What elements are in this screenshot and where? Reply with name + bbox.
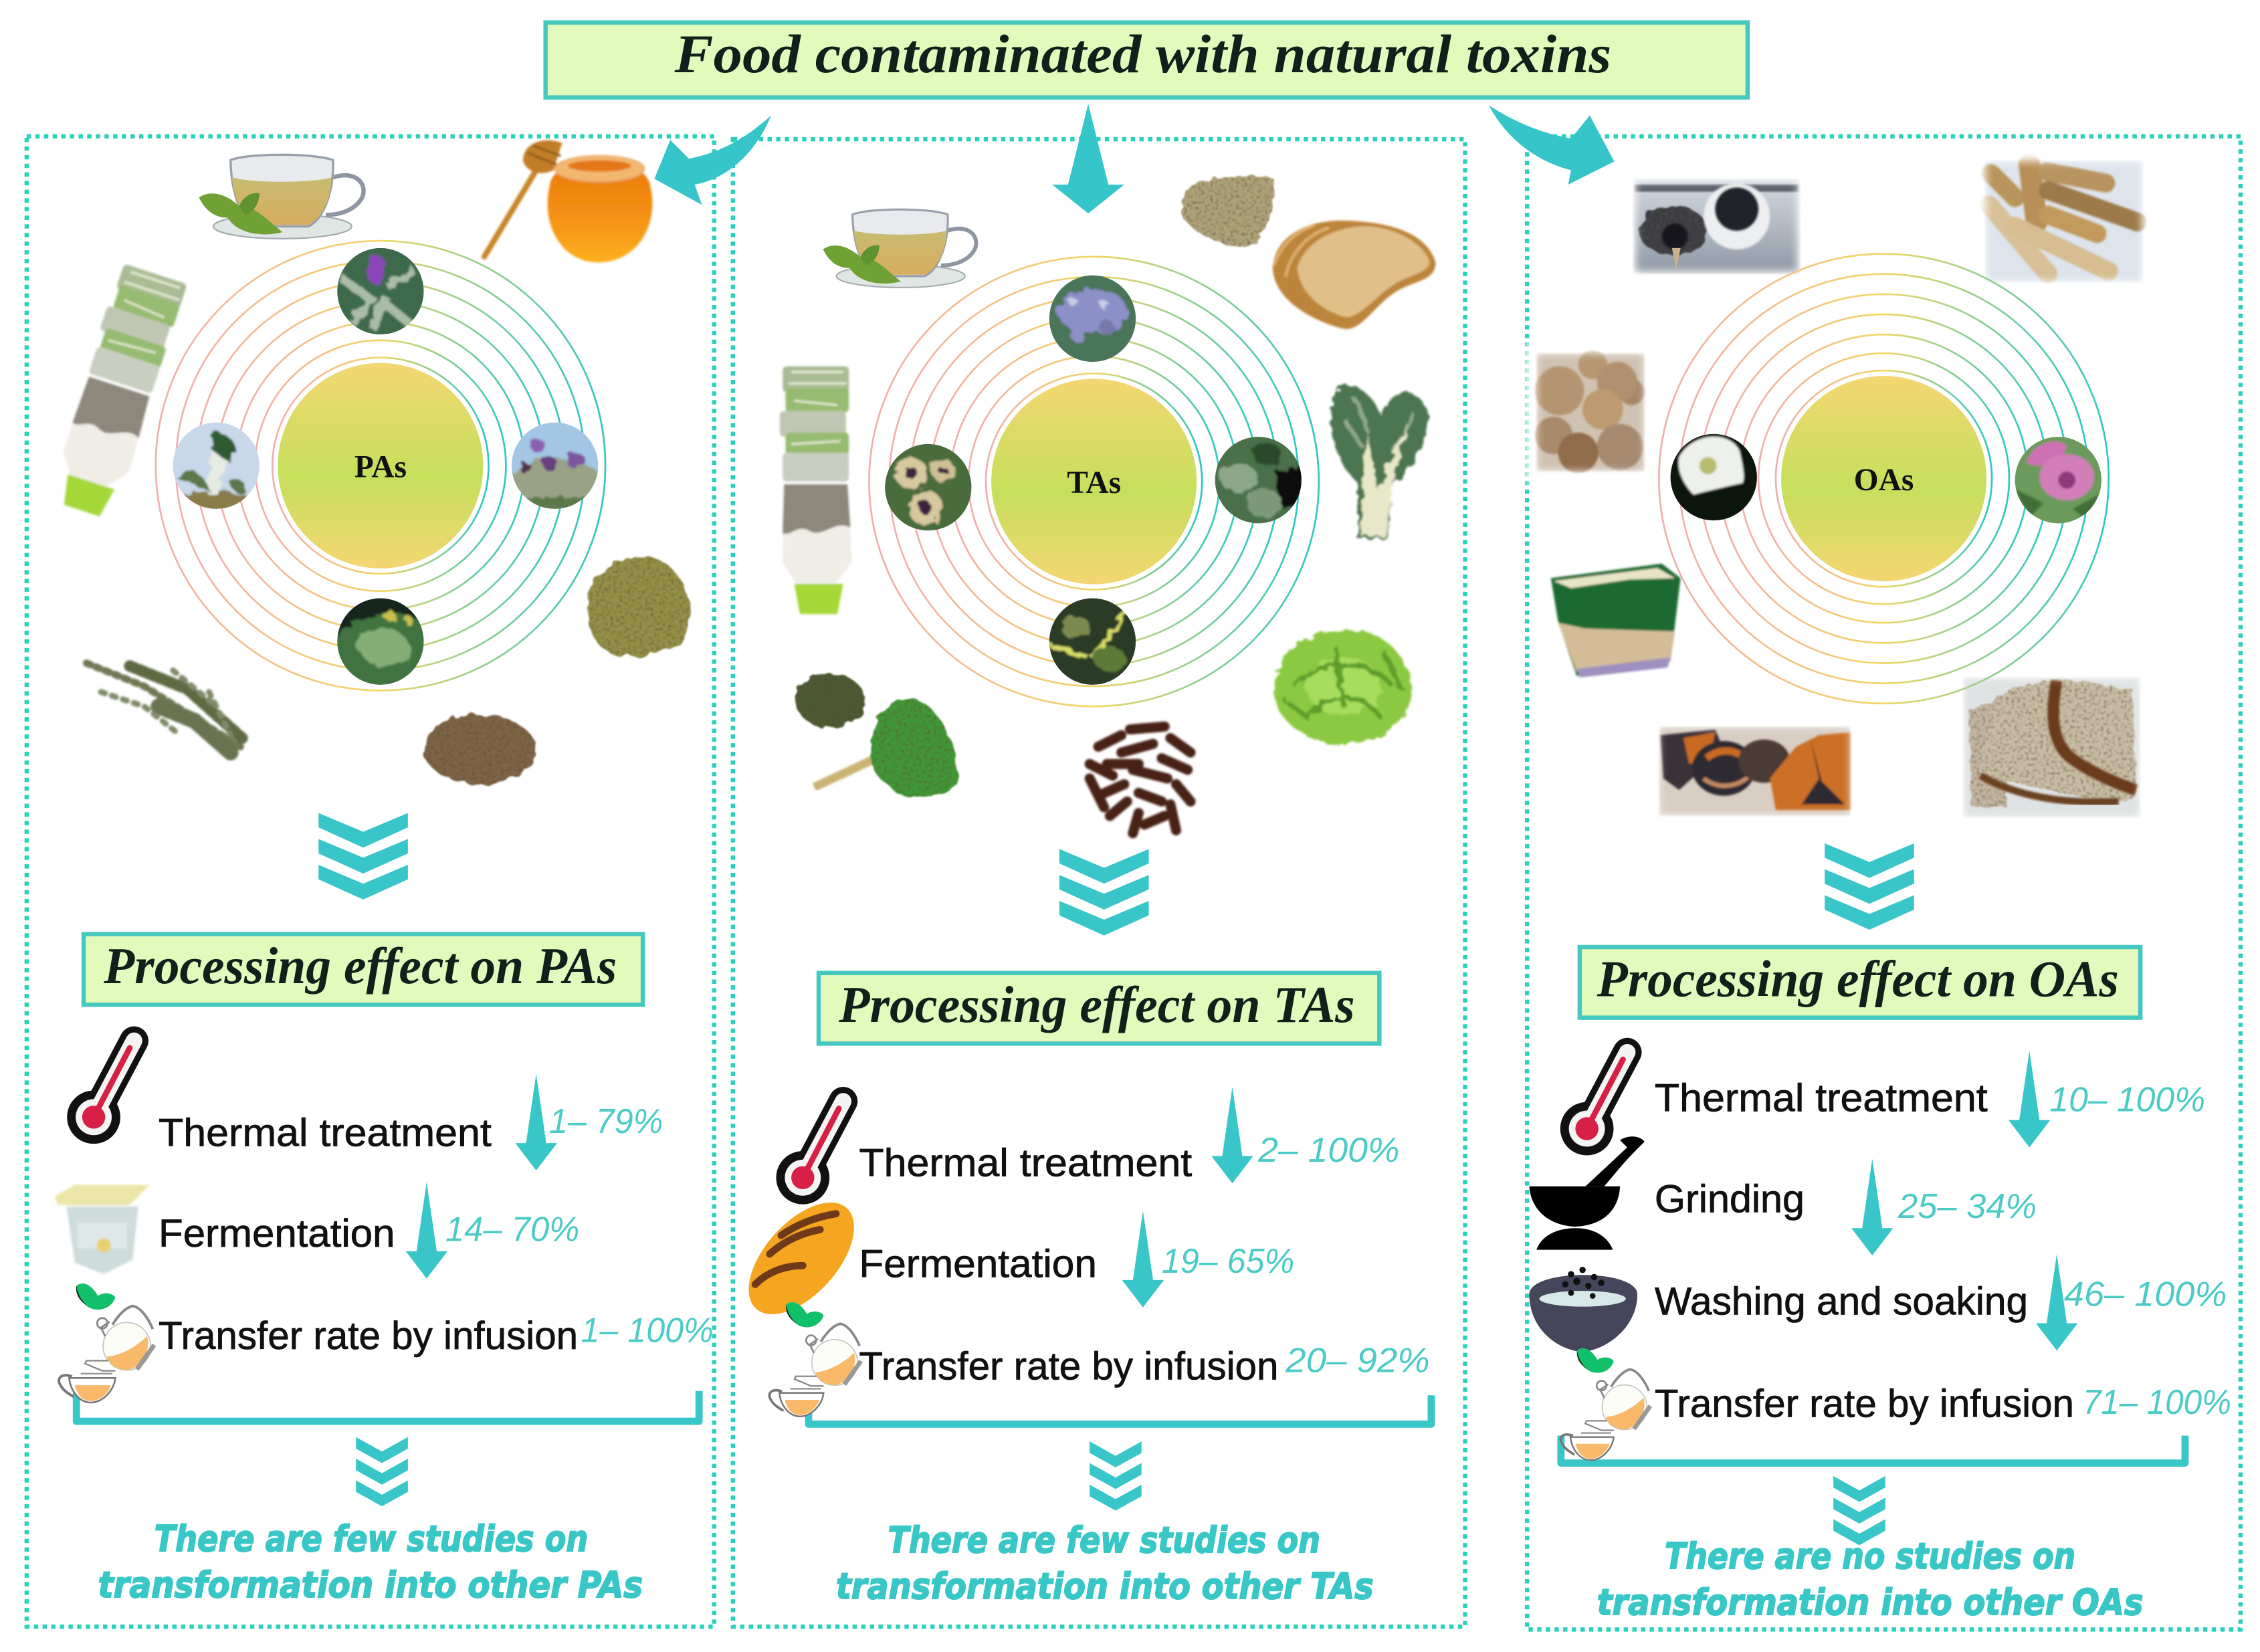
food: spice powder xyxy=(424,715,536,785)
text: washing and soaking: Washing and soaking xyxy=(1655,1280,2028,1324)
arrow: title to OAs xyxy=(1489,106,1615,185)
icon: thermometer (OAs) xyxy=(1560,1052,1627,1155)
text: thermal treatment (OAs): Thermal treatment xyxy=(1655,1077,1988,1120)
food: cloves xyxy=(1090,726,1191,833)
panel: TAs frame xyxy=(733,139,1465,1627)
food: cookies photo xyxy=(1531,348,1650,477)
text: thermal treatment (TAs): Thermal treatment xyxy=(859,1142,1192,1185)
ring diagram: OAs xyxy=(1659,253,2109,704)
food: tea bags (PAs) xyxy=(45,263,190,521)
bracket: TAs xyxy=(809,1395,1431,1424)
value: 1–79%: 1– 79% xyxy=(549,1102,663,1140)
value: 14–70%: 14– 70% xyxy=(445,1210,579,1249)
text: transfer rate (PAs): Transfer rate by infusion xyxy=(159,1314,578,1358)
conclusion: TAs: There are few studies on xyxy=(888,1519,1320,1561)
arrow: thermal (PAs) xyxy=(515,1074,557,1170)
icon: teapot (OAs) xyxy=(1560,1348,1650,1460)
panel: PAs frame xyxy=(27,136,714,1627)
food: thyme sprig xyxy=(86,663,245,752)
text: grinding: Grinding xyxy=(1655,1178,1805,1221)
plant photos: PAs xyxy=(170,245,601,688)
conclusion: TAs xyxy=(836,1519,1374,1607)
value: 25–34%: 25– 34% xyxy=(1897,1186,2037,1225)
value: 2–100%: 2– 100% xyxy=(1257,1130,1399,1169)
arrow: washing xyxy=(2036,1254,2077,1350)
text: transfer rate (TAs): Transfer rate by infusion xyxy=(859,1345,1278,1388)
food: coriander xyxy=(815,700,958,798)
chevrons: OAs to processing xyxy=(1825,843,1914,930)
food: cereal box xyxy=(1551,564,1681,678)
arrow: title to TAs xyxy=(1052,104,1124,213)
title banner xyxy=(546,23,1748,98)
chevrons: TAs to conclusion xyxy=(1090,1441,1142,1511)
food: black tea photo xyxy=(1629,173,1805,278)
bracket: PAs xyxy=(76,1391,699,1421)
conclusion: OAs xyxy=(1597,1535,2143,1623)
icon: teapot (TAs) xyxy=(769,1302,861,1417)
value: 10–100%: 10– 100% xyxy=(2049,1080,2205,1119)
icon: mortar and pestle xyxy=(1529,1136,1645,1250)
conclusion: PAs: transformation into other PAs xyxy=(98,1564,643,1606)
text: fermentation (PAs): Fermentation xyxy=(159,1212,395,1255)
text: fermentation (TAs): Fermentation xyxy=(859,1243,1097,1286)
food: poppy seed roll photo xyxy=(1653,721,1857,822)
food: dried tea xyxy=(796,674,865,728)
chevrons: PAs to conclusion xyxy=(356,1437,408,1506)
arrow: fermentation (PAs) xyxy=(406,1182,447,1279)
bracket: OAs xyxy=(1561,1436,2185,1463)
conclusion: PAs xyxy=(98,1518,643,1606)
title banner: Food contaminated with natural toxins xyxy=(674,23,1611,84)
ring diagram: PAs: PAs xyxy=(354,449,407,484)
text: thermal treatment (PAs): Thermal treatment xyxy=(159,1111,492,1154)
food: tea bags (TAs) xyxy=(780,367,852,614)
arrow: thermal (OAs) xyxy=(2009,1051,2050,1148)
arrow: grinding xyxy=(1851,1159,1893,1255)
icon: thermometer (TAs) xyxy=(776,1102,843,1205)
icon: soaking bowl xyxy=(1529,1267,1637,1352)
food: tea cup (PAs) xyxy=(199,154,364,239)
ring diagram: PAs xyxy=(156,241,605,690)
conclusion: OAs: There are no studies on xyxy=(1665,1535,2075,1577)
food: bread slices xyxy=(1273,221,1435,329)
ring diagram: OAs: OAs xyxy=(1854,463,1914,498)
ring diagram: TAs: TAs xyxy=(1067,466,1121,500)
ring diagram: TAs xyxy=(869,257,1319,706)
value: 46–100%: 46– 100% xyxy=(2064,1275,2227,1314)
plant photos: TAs xyxy=(882,272,1304,688)
value: 71–100%: 71– 100% xyxy=(2083,1382,2231,1421)
plant photos: OAs xyxy=(1667,431,2104,526)
heading: processing effect on PAs: Processing effect on PAs xyxy=(103,937,617,995)
text: transfer rate (OAs): Transfer rate by infusion xyxy=(1655,1382,2074,1426)
chevrons: OAs to conclusion xyxy=(1833,1476,1885,1545)
heading: processing effect on TAs: Processing effect on TAs xyxy=(838,976,1355,1033)
food: chard xyxy=(1331,385,1428,539)
arrow: thermal (TAs) xyxy=(1211,1087,1253,1183)
icon: teapot (PAs) xyxy=(59,1283,155,1403)
food: bread sticks photo xyxy=(1979,154,2149,288)
heading: processing effect on OAs: Processing effect on OAs xyxy=(1597,950,2119,1007)
food: seeds pile xyxy=(1182,176,1274,247)
food: tea cup (TAs) xyxy=(823,209,976,288)
icon: thermometer (PAs) xyxy=(67,1041,134,1144)
arrow: title to PAs xyxy=(654,116,771,205)
chevrons: TAs to processing xyxy=(1059,849,1149,936)
icon: bread loaf xyxy=(729,1184,874,1333)
value: 19–65%: 19– 65% xyxy=(1162,1241,1294,1280)
food: honey jar xyxy=(484,140,652,262)
food: herb pile xyxy=(588,556,690,656)
icon: yogurt cup xyxy=(55,1185,150,1274)
arrow: fermentation (TAs) xyxy=(1122,1211,1164,1308)
value: 20–92%: 20– 92% xyxy=(1285,1341,1430,1380)
value: 1–100%: 1– 100% xyxy=(581,1310,714,1349)
food: poppy bread photo xyxy=(1957,672,2146,823)
chevrons: PAs to processing xyxy=(318,813,408,900)
food: lettuce xyxy=(1274,630,1413,745)
conclusion: TAs: transformation into other TAs xyxy=(836,1565,1374,1607)
panel: OAs frame xyxy=(1527,136,2241,1629)
conclusion: PAs: There are few studies on xyxy=(155,1518,588,1560)
conclusion: OAs: transformation into other OAs xyxy=(1597,1581,2143,1623)
